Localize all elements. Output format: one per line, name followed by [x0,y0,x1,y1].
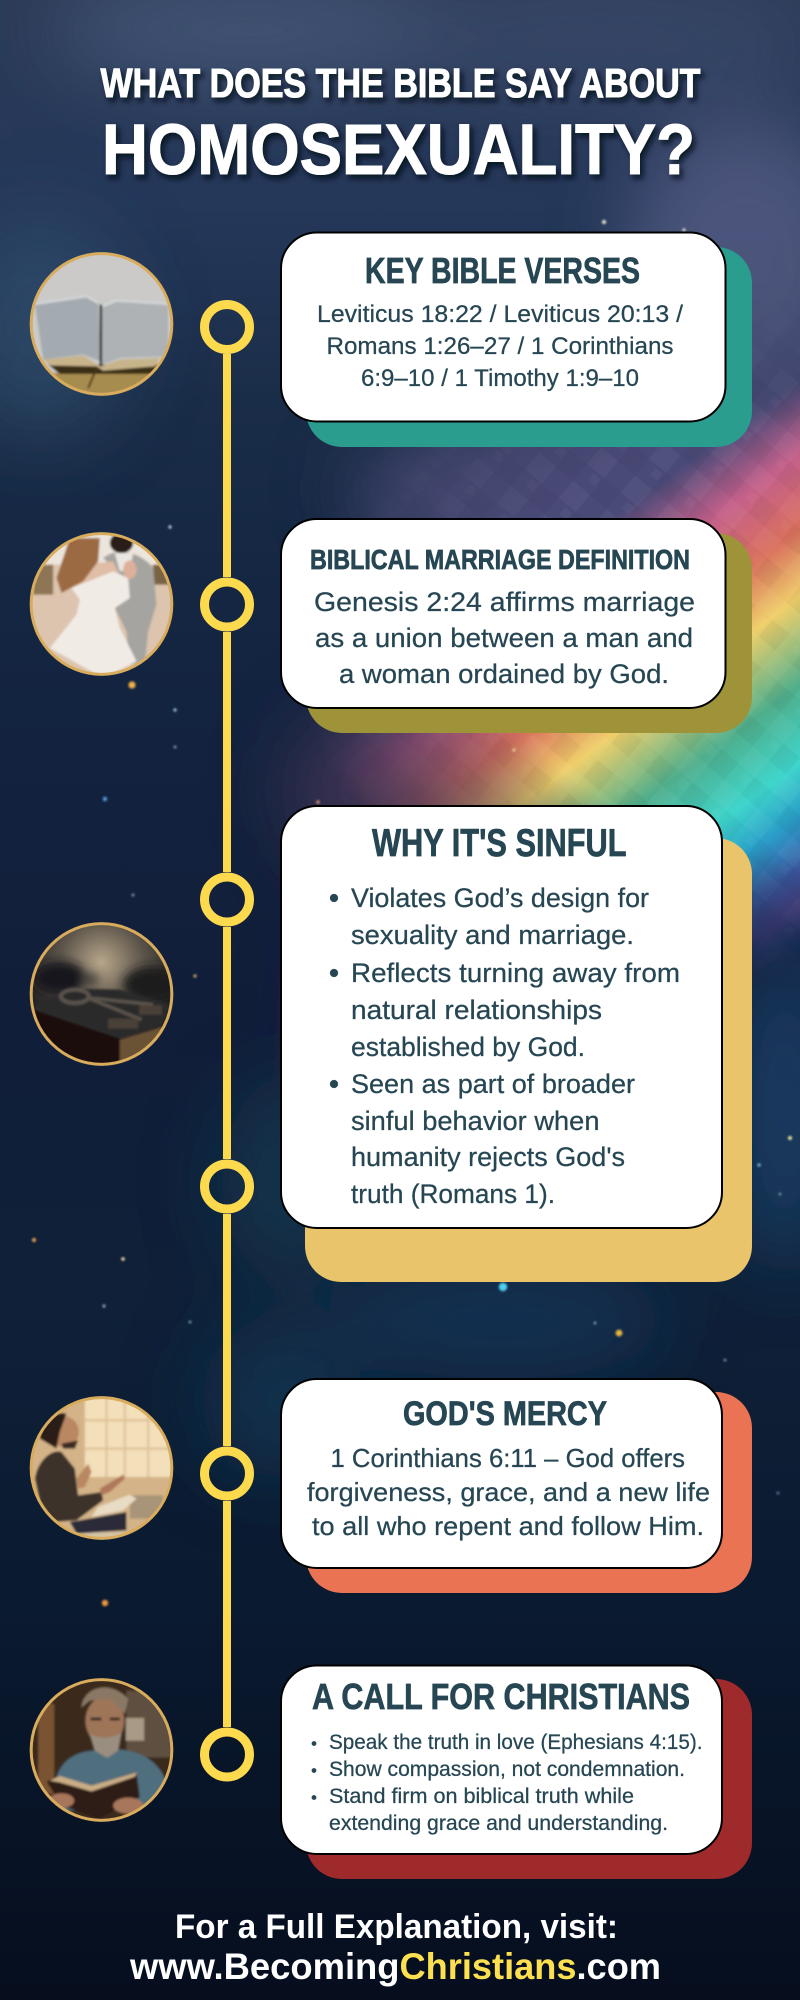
verse list: Leviticus 18:22 / Leviticus 20:13 / [317,301,683,328]
timeline: yellow line with ring nodes [204,304,250,1777]
heading: biblical marriage definition: BIBLICAL MARRIAGE DEFINITION [310,544,690,575]
marriage text: as a union between a man and [315,623,693,653]
verse list: Romans 1:26–27 / 1 Corinthians [326,333,674,360]
bullet list: reasons: truth (Romans 1). [351,1179,555,1209]
photo: wedding couple [27,531,176,678]
heading: a call for Christians: A CALL FOR CHRISTIANS [312,1676,690,1717]
mercy text: to all who repent and follow Him. [312,1511,704,1541]
bullet list: reasons: humanity rejects God's [351,1142,625,1172]
bullet list: calls to action: Show compassion, not condemnation. [329,1758,685,1781]
photo: bearded man reading a book [27,1677,176,1824]
panel: why it's sinful [281,806,752,1282]
footer: call to visit website [129,1908,661,1987]
bullet list: reasons: Seen as part of broader [351,1069,635,1099]
mercy text [307,1443,710,1541]
footer: call to visit website: .com [576,1946,661,1987]
bullet list: calls to action: Stand firm on biblical truth while [329,1785,634,1808]
panel: a call for Christians [281,1666,752,1879]
marriage text [314,587,695,689]
footer: call to visit website: www.Becoming [129,1946,400,1987]
heading: why it's sinful: WHY IT'S SINFUL [372,822,626,865]
title line 2: HOMOSEXUALITY? [102,111,695,190]
bullet list: calls to action: Speak the truth in love (Ephesians 4:15). [329,1731,702,1754]
photo: keys on a book under a stormy sky [27,921,183,1068]
photo: man praying with open Bible [27,1395,176,1545]
panel: God's mercy [281,1379,752,1593]
bullet list: reasons: sexuality and marriage. [351,920,634,950]
verse list: 6:9–10 / 1 Timothy 1:9–10 [361,365,639,392]
heading: God's mercy: GOD'S MERCY [403,1395,607,1433]
bullet list: reasons: Violates God’s design for [351,883,649,913]
bullet list: reasons [330,883,680,1209]
mercy text: 1 Corinthians 6:11 – God offers [330,1443,685,1473]
title [100,60,700,190]
panel: biblical marriage definition [281,519,752,733]
photo: open Bible [27,251,176,400]
bullet list: reasons: sinful behavior when [351,1106,600,1136]
marriage text: Genesis 2:24 affirms marriage [314,587,695,617]
bullet list: calls to action [312,1731,702,1835]
marriage text: a woman ordained by God. [339,659,669,689]
footer: call to visit website: For a Full Explanation, visit: [175,1908,618,1946]
mercy text: forgiveness, grace, and a new life [307,1477,710,1507]
verse list [317,301,683,392]
bullet list: calls to action: extending grace and understanding. [329,1812,668,1835]
bullet list: reasons: Reflects turning away from [351,958,680,988]
bullet list: reasons: natural relationships [351,995,602,1025]
panel: key Bible verses [281,232,752,447]
heading: key Bible verses: KEY BIBLE VERSES [365,250,640,291]
footer: call to visit website: Christians [400,1946,576,1987]
bullet list: reasons: established by God. [351,1032,585,1062]
